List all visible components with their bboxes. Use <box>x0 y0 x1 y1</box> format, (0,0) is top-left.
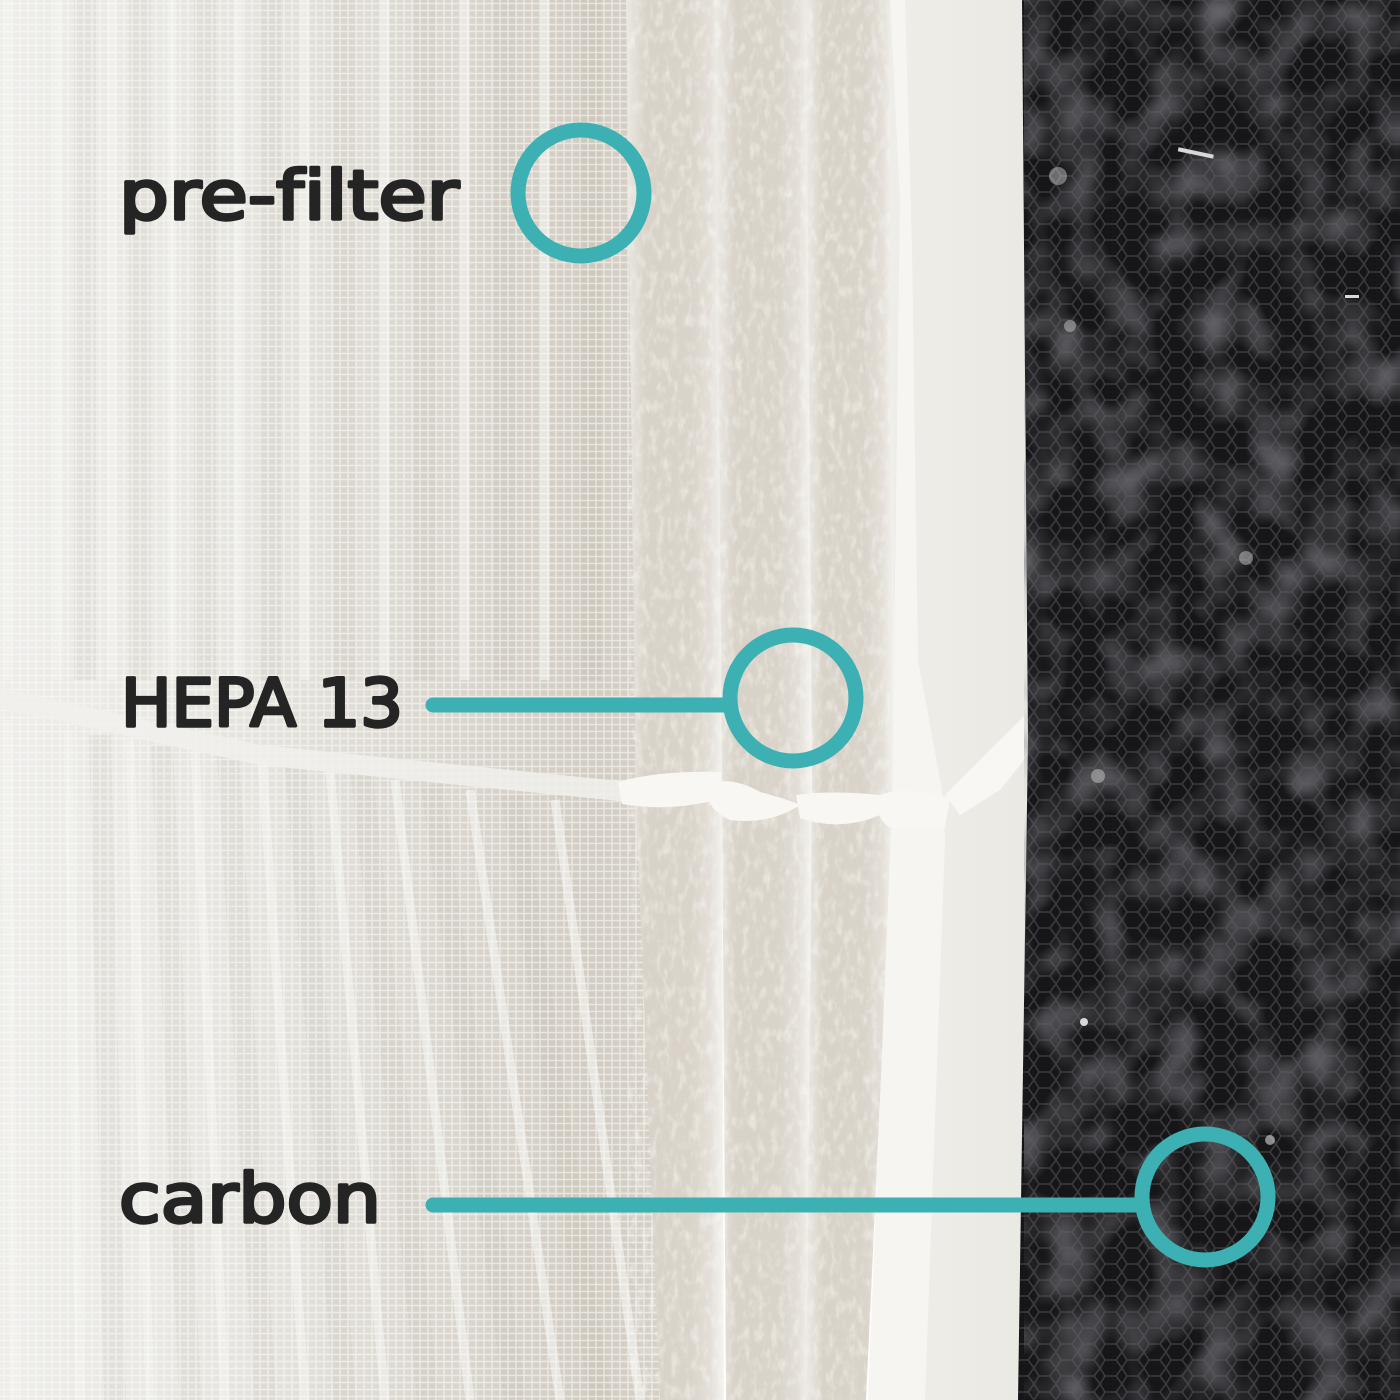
HEPA pleat 3 <box>806 0 895 1400</box>
pleat ties <box>618 716 1036 828</box>
label: pre-filter: pre-filter <box>119 157 459 236</box>
label: HEPA 13: HEPA 13 <box>121 665 403 742</box>
fibre texture <box>628 0 890 1400</box>
callout: HEPA 13 <box>121 635 856 761</box>
carbon layer <box>1018 0 1400 1400</box>
connector line: carbon <box>433 1198 1136 1212</box>
seam across mesh <box>0 698 630 792</box>
marker ring: pre-filter <box>518 130 644 256</box>
pre-filter mesh layer <box>0 0 700 1400</box>
marker ring: carbon <box>1142 1134 1268 1260</box>
callout: carbon <box>119 1134 1268 1260</box>
HEPA pleat 1 <box>626 0 724 1400</box>
label: carbon: carbon <box>119 1160 381 1239</box>
HEPA outer pleat <box>868 0 1028 1400</box>
HEPA pleat 2 <box>716 0 812 1400</box>
marker ring: HEPA 13 <box>730 635 856 761</box>
callout: pre-filter <box>119 130 644 256</box>
connector line: HEPA 13 <box>433 698 724 712</box>
